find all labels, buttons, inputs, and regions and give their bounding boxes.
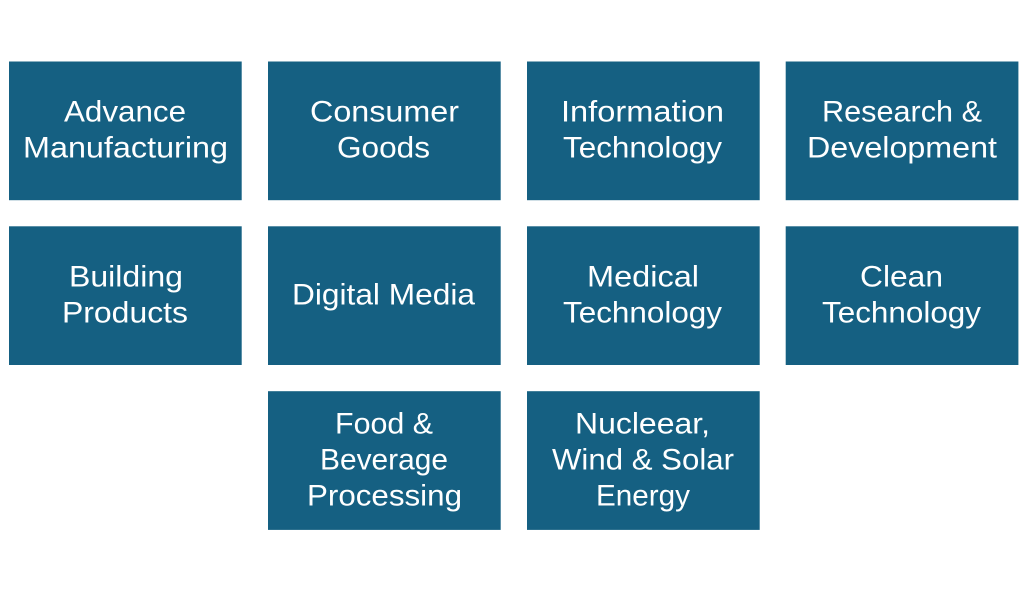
box: Food & Beverage Processing xyxy=(268,391,501,530)
box: Information Technology: Technology xyxy=(563,132,722,164)
box: Food & Beverage Processing: Food & xyxy=(335,408,433,440)
box: Advance Manufacturing xyxy=(9,62,242,200)
box: Research & Development: Development xyxy=(807,132,998,164)
box: Building Products: Products xyxy=(62,296,188,330)
box: Digital Media: Digital Media xyxy=(292,278,475,312)
box: Advance Manufacturing: Manufacturing xyxy=(23,132,228,164)
box: Research & Development xyxy=(786,62,1018,200)
box: Information Technology xyxy=(527,62,760,200)
box: Food & Beverage Processing: Processing xyxy=(307,480,462,512)
box: Medical Technology: Medical xyxy=(587,260,699,294)
box: Consumer Goods: Consumer xyxy=(310,96,459,128)
box: Nuclear, Wind & Solar Energy xyxy=(527,391,760,530)
box: Digital Media xyxy=(268,226,501,365)
box: Clean Technology xyxy=(786,226,1018,365)
box: Nuclear, Wind & Solar Energy: Energy xyxy=(596,480,690,512)
box: Advance Manufacturing: Advance xyxy=(64,96,186,128)
box: Consumer Goods xyxy=(268,62,501,200)
box: Clean Technology: Clean xyxy=(860,260,943,294)
box: Building Products: Building xyxy=(69,260,183,294)
box: Research & Development: Research & xyxy=(822,96,982,128)
box: Medical Technology xyxy=(527,226,760,365)
box: Clean Technology: Technology xyxy=(822,296,981,330)
box: Nuclear, Wind & Solar Energy: Nucleear, xyxy=(575,408,710,440)
box: Nuclear, Wind & Solar Energy: Wind & Solar xyxy=(552,444,734,476)
box: Information Technology: Information xyxy=(561,96,724,128)
box: Consumer Goods: Goods xyxy=(337,132,430,164)
box: Building Products xyxy=(9,226,242,365)
box: Food & Beverage Processing: Beverage xyxy=(320,444,448,476)
box: Medical Technology: Technology xyxy=(563,296,722,330)
